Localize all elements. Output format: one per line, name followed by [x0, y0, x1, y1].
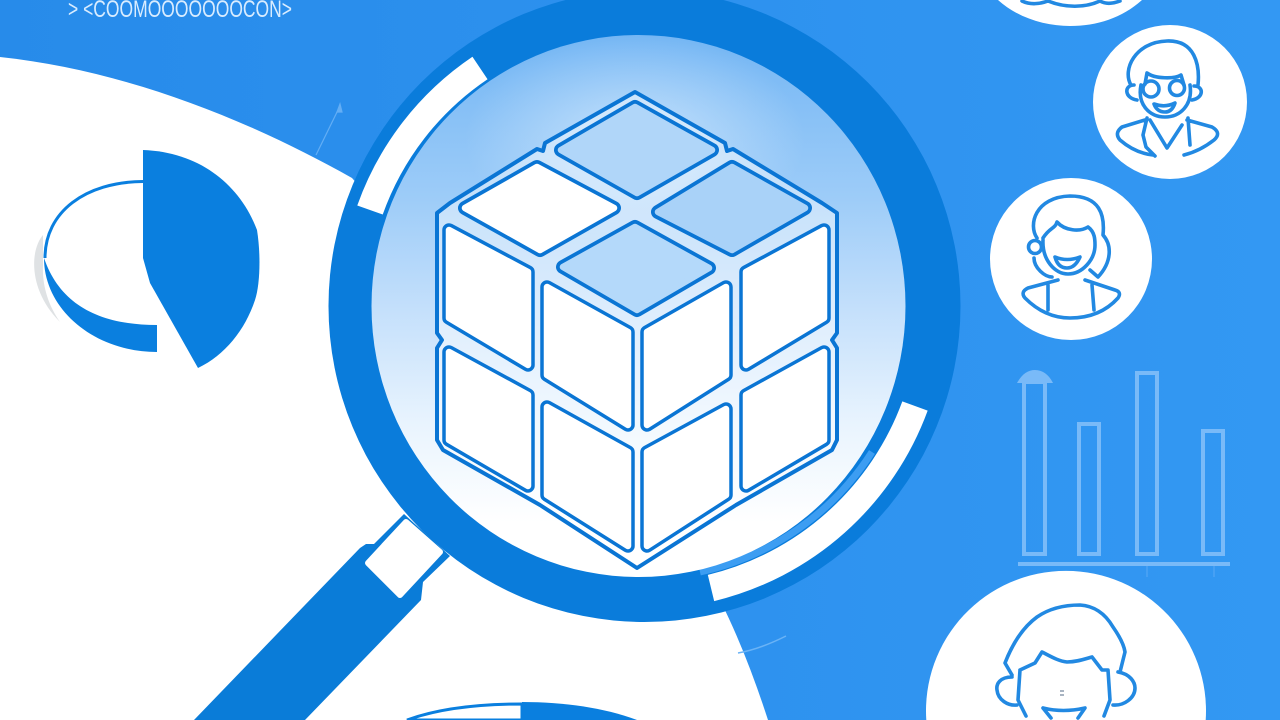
torso: [1023, 280, 1119, 318]
ear: [1028, 240, 1042, 254]
cube top face: front: [563, 227, 709, 310]
fringe and face: [1018, 652, 1110, 716]
ring white arc: lower right: [711, 406, 915, 588]
bottom pie blue slice: [522, 702, 637, 720]
chart axis: [1018, 562, 1230, 577]
white curved panel: [0, 57, 768, 720]
bar 2: [1079, 424, 1099, 554]
mouth: [1043, 708, 1085, 718]
magnifier ring: [328, 0, 960, 622]
faint arrow: upper: [316, 104, 342, 155]
bar 4: [1203, 431, 1223, 554]
bottom pie outline: [407, 704, 522, 720]
bar chart: [1017, 370, 1230, 577]
cube top face: right: [658, 167, 805, 250]
face and fringe: [1043, 222, 1095, 274]
pie top outline: [45, 182, 143, 258]
ring white arc: upper left: [370, 68, 480, 210]
nose: [1060, 691, 1064, 695]
magnifier lens: [372, 35, 906, 577]
bottom pie chart, cropped: [407, 702, 637, 720]
hair: [1128, 41, 1198, 85]
mouth: [1154, 103, 1175, 112]
cube side faces: [449, 230, 824, 546]
avatar: bottom person: [926, 571, 1206, 720]
cube outer outline: [437, 92, 837, 568]
cube: [437, 92, 837, 568]
magnifier handle: [194, 514, 450, 720]
hair: [1005, 605, 1125, 675]
glasses: [1143, 80, 1184, 97]
torso: [1117, 118, 1218, 156]
ring highlight arc: [700, 452, 872, 572]
ears: [997, 672, 1135, 705]
handle collar: [368, 522, 440, 595]
pie shadow: [34, 235, 60, 322]
handle grip and connector strips: [194, 514, 450, 720]
face and fringe: [1140, 73, 1190, 117]
hair: [1033, 196, 1109, 277]
avatar: person with glasses: [1093, 25, 1247, 179]
cube top face: back: [561, 107, 712, 193]
pie chart icon: [34, 150, 259, 368]
avatar: top, cropped: [998, 0, 1142, 26]
pie raised slice: [143, 150, 259, 368]
bar 3: [1137, 373, 1157, 554]
mouth: [1055, 257, 1080, 268]
pie base band: [44, 258, 157, 352]
ears: [1127, 85, 1201, 100]
avatar: person with wavy hair: [990, 178, 1152, 340]
faint arrow: lower: [738, 636, 786, 653]
cube top face: left: [465, 167, 614, 250]
lens glow: [465, 35, 805, 245]
bar 1 with dome cap: [1017, 370, 1053, 554]
